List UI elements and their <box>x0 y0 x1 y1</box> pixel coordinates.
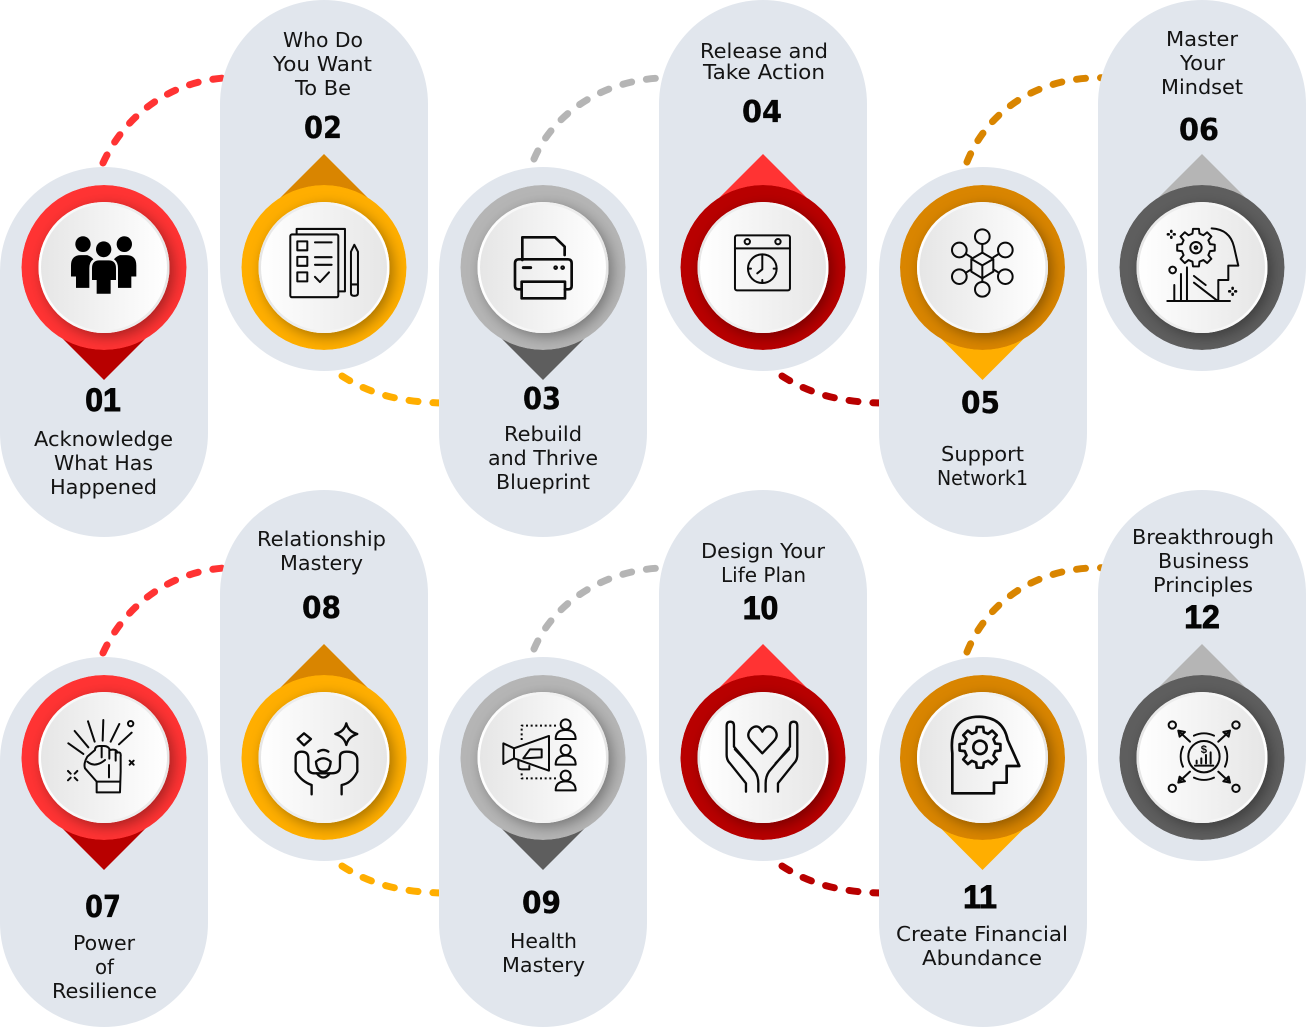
panel: step 06 <box>1098 0 1306 371</box>
pill background 11 <box>879 657 1087 1027</box>
label 06 <box>1161 27 1243 99</box>
connector: step 10 to 11 <box>782 866 910 893</box>
label 06: Mindset <box>1161 75 1243 99</box>
icon: mind and gear <box>1167 228 1238 301</box>
label 01 <box>34 427 173 499</box>
pill background 02 <box>220 0 428 371</box>
number 10: 10 <box>743 590 778 626</box>
label 07: Resilience <box>52 979 157 1003</box>
marker ring 04 <box>680 185 846 350</box>
icon: raised fist <box>68 720 134 792</box>
marker tip 11 <box>922 810 1042 870</box>
label 07: Power <box>73 931 136 955</box>
marker disc 08 <box>258 692 390 823</box>
connector: step 1 to 2 <box>103 77 250 163</box>
connector: step 8 to 9 <box>342 866 470 893</box>
icon: head with gear <box>952 717 1019 793</box>
marker disc 06 <box>1136 202 1268 333</box>
marker tip 10 <box>703 644 823 704</box>
label 04: Take Action <box>702 60 825 84</box>
label 05 <box>937 442 1028 490</box>
pill background 05 <box>879 167 1087 537</box>
marker ring 10 <box>680 675 846 840</box>
panel: step 12 <box>1098 490 1306 861</box>
marker disc 04 <box>698 202 828 333</box>
icon: money growth arrows: $ <box>1201 744 1208 756</box>
marker tip 02 <box>264 154 384 214</box>
marker ring 08 <box>242 675 406 840</box>
number 02: 02 <box>304 111 342 146</box>
label 03: and Thrive <box>488 446 598 470</box>
marker tip 04 <box>703 154 823 214</box>
marker tip 07 <box>44 810 164 870</box>
label 05: Support <box>941 442 1024 466</box>
marker tip 09 <box>483 810 603 870</box>
pill background 03 <box>439 167 647 537</box>
number 03: 03 <box>523 382 561 417</box>
number 01: 01 <box>85 382 121 418</box>
marker disc 09 <box>478 692 608 823</box>
label 02: Who Do <box>283 28 363 52</box>
connector: step 2 to 3 <box>342 376 470 403</box>
icon: calendar clock <box>735 235 790 290</box>
marker tip 01 <box>44 320 164 380</box>
marker ring 05 <box>900 185 1065 350</box>
label 08: Relationship <box>257 527 386 551</box>
label 01: Acknowledge <box>34 427 173 451</box>
label 02: You Want <box>272 52 372 76</box>
label 03: Rebuild <box>504 422 582 446</box>
label 01: Happened <box>50 475 157 499</box>
pill background 09 <box>439 657 647 1027</box>
marker disc 10 <box>698 692 828 823</box>
label 07 <box>52 931 157 1003</box>
icon: network cube <box>952 229 1013 297</box>
panel: step 04 <box>659 0 867 371</box>
label 12: Principles <box>1153 573 1253 597</box>
marker ring 02 <box>242 185 406 350</box>
connector: step 3 to 4 <box>534 77 690 159</box>
connector: step 4 to 5 <box>782 376 910 403</box>
marker ring 09 <box>460 675 626 840</box>
number 11: 11 <box>963 879 997 915</box>
marker disc 03 <box>478 202 608 333</box>
label 10 <box>701 539 826 587</box>
marker ring 12 <box>1120 675 1284 840</box>
label 04 <box>700 39 828 84</box>
marker ring 07 <box>22 675 186 840</box>
icon: checklist and pencil <box>290 229 358 297</box>
marker tip 06 <box>1142 154 1262 214</box>
pill background 07 <box>0 657 208 1027</box>
label 05: Network1 <box>937 466 1028 490</box>
marker disc 12 <box>1136 692 1268 823</box>
number 09: 09 <box>522 886 561 921</box>
label 03 <box>488 422 598 494</box>
label 09: Mastery <box>502 953 585 977</box>
label 12: Business <box>1158 549 1249 573</box>
marker disc 07 <box>38 692 170 823</box>
panel: step 11 <box>879 657 1087 1027</box>
panel: step 01 <box>0 167 208 537</box>
marker tip 03 <box>483 320 603 380</box>
pill background 04 <box>659 0 867 371</box>
panel: step 09 <box>439 657 647 1027</box>
marker tip 08 <box>264 644 384 704</box>
label 11: Abundance <box>922 946 1042 970</box>
label 02: To Be <box>294 76 351 100</box>
number 04: 04 <box>742 95 782 130</box>
label 12: Breakthrough <box>1132 525 1274 549</box>
label 12 <box>1132 525 1274 597</box>
marker ring 06 <box>1120 185 1284 350</box>
icon: megaphone and audience <box>503 719 576 790</box>
marker disc 05 <box>917 202 1048 333</box>
icon: money growth arrows <box>1169 721 1240 792</box>
connector: step 7 to 8 <box>103 567 250 653</box>
number 12: 12 <box>1184 599 1220 635</box>
marker ring 11 <box>900 675 1065 840</box>
connector: step 5 to 6 <box>967 77 1130 162</box>
panel: step 07 <box>0 657 208 1027</box>
pill background 01 <box>0 167 208 537</box>
panel: step 02 <box>220 0 428 371</box>
pill background 06 <box>1098 0 1306 371</box>
label 10: Life Plan <box>721 563 806 587</box>
marker disc 02 <box>258 202 390 333</box>
label 01: What Has <box>54 451 153 475</box>
connector: step 9 to 10 <box>534 567 690 649</box>
panel: step 08 <box>220 490 428 861</box>
icon: hands holding heart <box>727 722 797 792</box>
label 06: Your <box>1179 51 1226 75</box>
marker ring 01 <box>22 185 186 350</box>
pill background 08 <box>220 490 428 861</box>
label 11 <box>896 922 1068 970</box>
label 09 <box>502 929 585 977</box>
pill background 10 <box>659 490 867 861</box>
icon: person celebrating <box>296 723 357 794</box>
marker ring 03 <box>460 185 626 350</box>
label 08: Mastery <box>280 551 363 575</box>
number 07: 07 <box>85 890 121 925</box>
label 06: Master <box>1166 27 1239 51</box>
label 04: Release and <box>700 39 828 63</box>
label 07: of <box>95 955 115 979</box>
label 03: Blueprint <box>496 470 590 494</box>
icon: printer <box>515 237 572 298</box>
number 05: 05 <box>961 386 1000 421</box>
panel: step 10 <box>659 490 867 861</box>
label 11: Create Financial <box>896 922 1068 946</box>
panel: step 05 <box>879 167 1087 537</box>
marker disc 01 <box>38 202 170 333</box>
marker tip 05 <box>922 320 1042 380</box>
panel: step 03 <box>439 167 647 537</box>
number 08: 08 <box>302 591 341 626</box>
pill background 12 <box>1098 490 1306 861</box>
number 06: 06 <box>1179 113 1219 148</box>
label 08 <box>257 527 386 575</box>
label 09: Health <box>510 929 577 953</box>
icon: group of people <box>71 236 136 294</box>
label 02 <box>272 28 372 100</box>
connector: step 11 to 12 <box>967 567 1130 652</box>
marker tip 12 <box>1142 644 1262 704</box>
label 10: Design Your <box>701 539 826 563</box>
marker disc 11 <box>917 692 1048 823</box>
